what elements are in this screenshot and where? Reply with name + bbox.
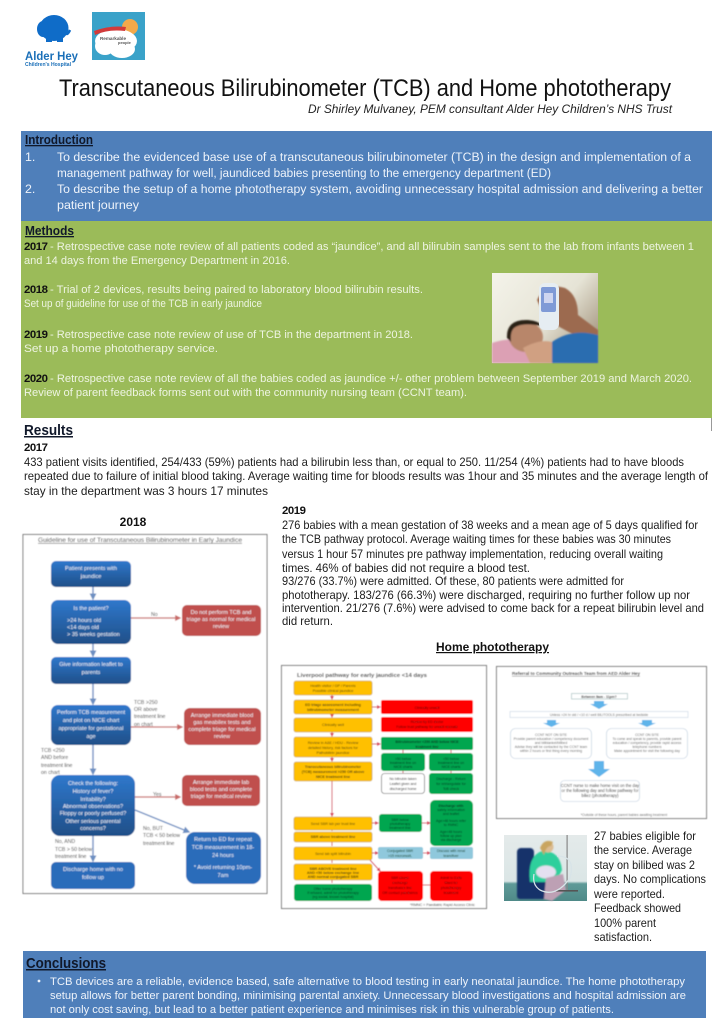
flow labels: AND before [41,755,68,761]
results 2017 [24,442,709,498]
author line: Dr Shirley Mulvaney, PEM consultant Alder Hey Children’s NHS Trust [308,102,673,116]
box: return to ED: Return to ED for repeat [194,837,252,843]
results 2017: stay in the department was 3 hours 17 minutes [24,485,268,498]
orange box labels: NICE treatment line [316,775,350,779]
flowchart: Liverpool pathway: Liverpool pathway for early jaundice <14 days [297,673,427,679]
box: CCNT nurse visit [560,780,640,802]
green pathway boxes: NICE charts [394,765,413,769]
box: is the patient [51,600,131,644]
green pathway boxes: Discharge with [439,804,463,808]
green pathway boxes: safety information [437,808,465,812]
box: patient presents: Patient presents with [65,566,117,572]
box: check the following: Check the following: [68,781,118,787]
orange box labels: detailed history, risk factors for [308,746,359,750]
conclusions text: not only cost saving, but lead to a better patient experience and minimises risk in this vulnerable group of patients. [50,1004,614,1016]
box: check the following: concerns? [80,826,106,832]
referral footnote: *Outside of these hours, parent babies awaiting treatment [581,813,667,817]
box: return to ED: TCB measurement in 18- [192,845,254,851]
box: return to ED: 7am [218,873,229,879]
blue pathway boxes: >15 micromol/L [388,854,412,858]
intro text: patient journey [57,198,140,212]
green pathway boxes: TcB check [443,787,459,791]
box: check the following: History of fever? [73,789,113,795]
green pathway boxes: No bilirubin taken [389,777,417,781]
box: perform TCB: Perform TCB measurement [57,710,126,716]
orange box labels: ED triage assessment including [305,703,361,707]
green pathway boxes: discharged home [390,787,416,791]
intro text: management pathway for well, jaundiced babies presenting to the emergency department (ED) [57,166,551,180]
flow labels: OR above [134,707,157,713]
box: return to ED: * Avoid returning 10pm- [194,865,252,871]
box: arrange blood gas: review [214,734,231,740]
box: criteria [510,712,688,718]
flow labels: TCB >250 [134,700,158,706]
box: perform TCB: and plot on NICE chart [63,718,120,724]
box: information leaflet: parents [82,670,101,676]
methods 2018: - Trial of 2 devices, results being paired to laboratory blood bilirubin results. [50,284,423,296]
methods 2017 [24,241,694,267]
box: CCNT on site: education / competency, provide rapid access [613,741,682,745]
heading: methods: Methods [25,223,74,238]
title: Transcutaneous Bilirubinometer (TCB) and Home phototherapy [59,75,671,102]
blue pathway boxes: team/liver [443,854,459,858]
box: discharge home: Discharge home with no [63,867,123,873]
green pathway boxes: Offer home phototherapy [314,887,353,891]
orange box labels: Health visitor / GP / Parents [310,684,356,688]
pathway arrows [332,695,451,885]
box: arrange lab blood: blood tests and complete [190,787,252,793]
home phototherapy summary text: days. No complications [594,873,706,886]
results 2019: times. 46% of babies did not require a blood test. [282,562,530,575]
intro text: 1. [25,150,35,164]
home phototherapy summary text: were reported. [593,888,665,901]
heading: results: Results [24,422,73,439]
conclusions text [38,976,686,1016]
box: patient presents [51,561,131,587]
methods 2017: and 14 days from the Emergency Department in 2016. [24,255,290,267]
heading: home phototherapy: Home phototherapy [436,640,549,654]
results 2019: the TCB pathway protocol. Average waiting times for these babies was 30 minutes [282,533,671,546]
home phototherapy summary text: 27 babies eligible for [594,830,696,843]
box: CCNT nurse visit: or the following day and follow pathway for [561,788,639,793]
red pathway boxes: OR contact paediatrics [382,891,418,895]
green pathway boxes: Bilirubinometer <250 AND below NICE [395,740,459,744]
orange box labels: SBR ABOVE treatment line [310,867,356,871]
green pathway boxes: treatment line [389,826,411,830]
methods 2019: 2019 [24,329,48,341]
results 2019: 276 babies with a mean gestation of 38 weeks and a mean age of 5 days qualified for [282,519,698,532]
box: perform TCB [51,705,131,745]
green pathway boxes: NICE charts [442,765,461,769]
intro text: 2. [25,182,35,196]
home phototherapy summary text: Feedback showed [594,902,681,915]
green pathway boxes [294,737,473,901]
red pathway boxes: Admit to Dolls [440,876,462,880]
blue pathway boxes: Conjugated SBR [387,849,414,853]
logo: Remarkable people: people [118,40,132,45]
flow labels: treatment line [134,714,166,720]
heading: conclusions: Conclusions [26,955,106,972]
box: CCNT on site: telephone numbers [632,745,662,749]
box: CCNT on site: To come and speak to parents, provide parent [613,737,682,741]
flow labels: No, BUT [143,826,164,832]
orange box labels: AND <50 below exchange line [307,871,359,875]
box: return to ED [186,832,261,884]
box: arrange blood gas: gas meabilex tests and [193,720,251,726]
home phototherapy summary text: satisfaction. [594,931,652,944]
green pathway boxes: <50 below [443,757,459,761]
results 2017: 2017 [24,442,48,454]
orange box labels: SBR above treatment line [311,835,355,839]
green pathway boxes: Leaflet given and [390,782,416,786]
intro text: To describe the evidenced base use of a transcutaneous bilirubinometer (TCB) in the design and implementation of a [57,150,691,164]
methods 2019 [24,329,413,355]
panel: introduction [21,131,712,221]
green pathway boxes: treatment line on [390,761,416,765]
box: is the patient: <14 days old [67,625,99,631]
intro text [25,150,703,212]
flowchart: guideline for TCB use [23,534,267,894]
box: do not perform: triage as normal for medical [186,617,256,623]
red arrows [131,618,182,797]
green pathway boxes: If refused, admit for phototherapy [307,891,359,895]
methods 2017: - Retrospective case note review of all patients coded as “jaundice”, and all bilirubin samples sent to the lab from infants between 1 [50,241,694,253]
box: do not perform: Do not perform TCB and [191,610,251,616]
flowchart: referral to community outreach [496,666,706,818]
panel: conclusions [23,951,706,1018]
box: return to ED: 24 hours [212,853,234,859]
box: perform TCB: appropriate for gestational [58,726,124,732]
box: CCNT nurse visit: biliez (phototherapy) [581,793,619,798]
methods 2018: 2018 [24,284,48,296]
orange box labels: Send SBR lab per trust line [311,822,355,826]
conclusions text: TCB devices are a reliable, evidence based, safe alternative to blood testing in early neonatal jaundice. The home phototherapy [50,976,685,988]
red pathway boxes: SBR above [391,876,409,880]
logo: Alder Hey Children's Hospital [25,15,79,68]
methods 2017: 2017 [24,241,48,253]
green pathway boxes: (eg social, known hospital) [312,895,354,899]
flowchart: referral to community outreach: Referral to Community Outreach Team from AED Alder Hey [512,671,640,677]
box: CCNT not on site [510,728,592,758]
orange box labels: Possible clinical jaundice [313,689,353,693]
flow labels: treatment line [55,854,87,860]
flow labels: TCB > 50 below [55,847,92,853]
heading: introduction: Introduction [25,132,93,147]
box: CCNT not on site: Provide parent education / competency document [514,737,588,741]
green pathway boxes: via discharge [441,838,461,842]
results 2019: versus 1 hour 57 minutes pre pathway implementation, reducing overall waiting [282,548,663,561]
orange pathway boxes [294,681,372,880]
box: is the patient: >24 hours old [67,618,101,624]
logo: Remarkable people [92,12,145,60]
orange box labels: bilirubinometer measurement [307,708,360,712]
red pathway boxes: transfusion line [388,886,412,890]
blue pathway boxes [378,847,473,859]
red pathway boxes: phototherapy [441,886,461,890]
box: arrange lab blood: Arrange immediate lab [193,780,249,786]
methods 2019: - Retrospective case note review of use of TCB in the department in 2018. [50,329,413,341]
methods 2020 [24,373,692,399]
flow labels: treatment line [143,841,175,847]
results 2019: 2019 [282,505,306,517]
box: is the patient: Is the patient? [73,606,109,612]
light blue arrows [543,701,656,777]
green pathway boxes: Age>48 hours refer [436,819,467,823]
conclusions text: setup allows for better parent bonding, minimising parental anxiety. Unnecessary blood investigations and hospital admission are [50,990,686,1002]
box: CCNT not on site: Advise they will be contacted by the CCNT team [515,745,587,749]
green pathway boxes: treatment line on [438,761,464,765]
flow labels [41,612,180,860]
box: arrange lab blood [182,775,260,806]
flow arrows [93,587,189,861]
home phototherapy summary text [593,830,706,944]
box: check the following: Irritability? [80,797,106,803]
flow labels: treatment line [41,763,73,769]
green pathway boxes: follow up plan [440,834,462,838]
blue pathway boxes: Discuss with renal [437,849,465,853]
red pathway boxes: treatment [444,891,458,895]
results 2019: 93/276 (33.7%) were admitted. Of these, 80 patients were admitted for [282,575,624,588]
flowchart: Liverpool pathway [282,666,486,908]
green pathway boxes: SBR below [391,818,409,822]
green pathway boxes: Discharge - Return [436,777,466,781]
green pathway boxes: phototherapy [390,822,410,826]
flow labels: No, AND [55,839,75,845]
box: CCNT nurse visit: CCNT nurse to make home visit on the day [561,783,640,788]
methods 2020: Review of parent feedback forms sent out with the community nursing team (CCNT team). [24,387,467,399]
accent: right edge rule [711,418,712,431]
orange box labels [302,684,364,879]
box: patient presents: jaundice [80,574,101,580]
flow labels: on chart [41,770,60,776]
logo: Remarkable people: Remarkable [100,36,127,41]
box: discharge home [51,862,135,889]
box: arrange blood gas: Arrange immediate blood [191,713,253,719]
green pathway boxes: >50 below [395,757,411,761]
box: check the following: Floppy or poorly perfused? [60,811,126,817]
box: arrange lab blood: triage for medical review [191,794,252,800]
results 2017: 433 patient visits identified, 254/433 (59%) patients had a bilirubin less than, or equal to 250. 11/254 (4%) patients had to have bloods [24,456,684,469]
box: perform TCB: age [86,734,96,740]
green pathway boxes: and leaflet [443,812,459,816]
red pathway boxes: exchange [392,881,408,885]
box: between 8am-11pm: Between 8am - 11pm? [581,695,617,699]
red pathway boxes: Review by ED doctor [411,720,444,724]
flow labels: TCB < 50 below [143,833,180,839]
box: criteria: Unless >24 hr old / <10 d / well BILITOOLS prescribed at bedside [550,713,648,717]
box: CCNT on site: CCNT ON SITE [635,733,660,737]
panel: methods [21,221,712,418]
box: information leaflet [51,657,131,684]
home phototherapy summary text: 100% parent [594,917,657,930]
orange box labels: (TCB) measurement >250 OR above [302,770,364,774]
flow labels: Yes [153,792,162,798]
pathway footnote: *RMNC = Paediatric Rapid Access Clinic [410,903,475,907]
green pathway boxes: to RMNC [444,823,459,827]
logo: Alder Hey Children's Hospital: Children's Hospital [25,62,72,68]
orange box labels: Pathobilirin jaundice [316,751,350,755]
box: is the patient: > 35 weeks gestation [67,632,120,638]
results 2019 [282,505,704,628]
methods 2018: Set up of guideline for use of the TCB in early jaundice [24,298,262,310]
orange box labels: Clinically well [322,723,344,727]
logo: Alder Hey Children's Hospital: Alder Hey [25,51,79,63]
photo: newborn with TCB device [492,273,598,363]
box: arrange blood gas [184,708,261,745]
intro text: To describe the setup of a home phototherapy system, avoiding unnecessary hospital admission and delivering a better [57,182,703,196]
box: between 8am-11pm [572,694,628,699]
red pathway boxes: Clinically unwell [415,706,440,710]
photo: mother and baby on bilibed [504,835,587,901]
orange box labels: Transcutaneous bilirubinometer [305,765,362,769]
results 2019: phototherapy. 183/276 (66.3%) were discharged, requiring no further follow up nor [282,589,690,602]
box: discharge home: follow up [82,875,104,881]
flowchart: guideline for TCB use: Guideline for use of Transcutaneous Bilirubinometer in Early Jaundice [38,538,243,544]
flow labels: TCB <250 [41,748,65,754]
red pathway boxes [378,700,473,901]
home phototherapy summary text: the service. Average [594,844,692,857]
results 2019: did return. [282,615,333,628]
box: check the following: Abnormal observations? [63,804,123,810]
methods 2020: 2020 [24,373,48,385]
box: CCNT on site [606,728,688,758]
heading: 2018: 2018 [120,515,147,529]
results 2017: repeated due to failure of initial blood taking. Average waiting time for bloods results was 1hour and 35 minutes and the average length of [24,470,709,483]
methods 2020: - Retrospective case note review of all the babies coded as jaundice +/- other problem between September 2019 and March 2020. [50,373,692,385]
green pathway boxes: Age<48 hours [440,830,462,834]
flow labels: on chart [134,722,153,728]
methods 2019: Set up a home phototherapy service. [24,343,218,355]
box: do not perform: review [213,624,230,630]
methods 2018 [24,284,423,310]
results 2019: intervention. 21/276 (7.6%) were advised to come back for a repeat bilirubin level and [282,602,704,615]
orange box labels: Send lab split bilirubin [315,852,351,856]
home phototherapy summary text: stay on bilibed was 2 [594,859,695,872]
box: CCNT not on site: and biliblanket/bilibed [535,741,567,745]
red pathway boxes: Follow trust pathway for unwell neonate [396,725,458,729]
green pathway boxes: treatment line [416,745,439,749]
box: do not perform [182,605,261,636]
box: check the following [51,775,135,836]
box: arrange blood gas: complete triage for medical [188,727,256,733]
box: check the following: Other serious parental [65,819,121,825]
box: CCNT on site: Make appointment for visit the following day [614,749,680,753]
box: CCNT not on site: within 2 hours or first thing every morning [520,749,582,753]
orange box labels: AND normal conjugated SBR [308,875,359,879]
box: information leaflet: Give information leaflet to [59,662,123,668]
flow labels: No [151,612,158,618]
red pathway boxes: Ward for [444,881,458,885]
orange box labels: Review in A&E / HDU - Review [308,741,359,745]
box: CCNT not on site: CCNT NOT ON SITE [535,733,568,737]
green pathway boxes: for retriangulate for [436,782,467,786]
